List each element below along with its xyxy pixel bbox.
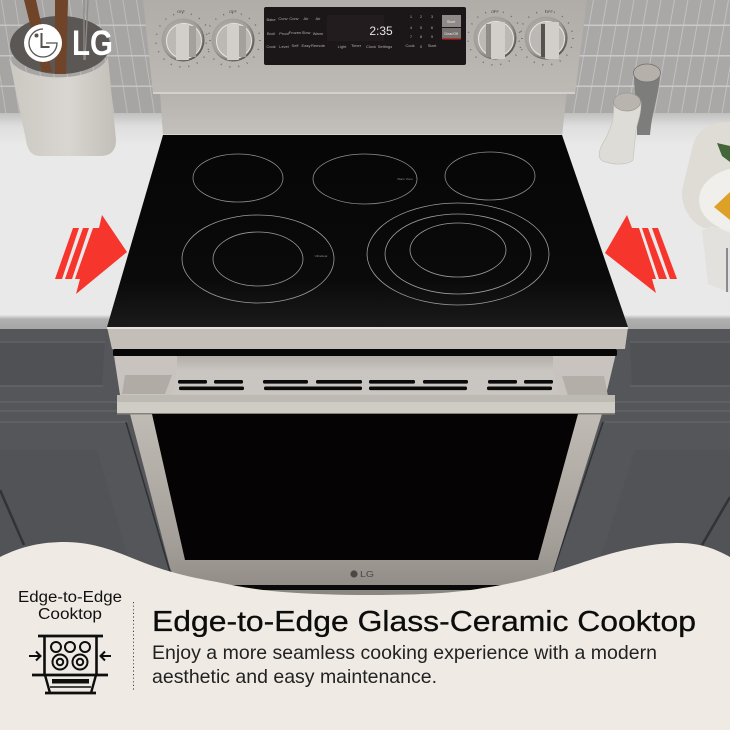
display panel: Clock [366,44,376,49]
display panel: Conv [278,16,288,21]
display panel: Easy [302,43,310,48]
display panel: Timer [351,43,362,48]
display panel: 7 [410,34,413,39]
burner bottom left [182,215,334,303]
display panel: Level [279,44,289,49]
description [152,642,657,688]
badge label: Edge-to-Edge [18,589,122,606]
display panel [264,7,466,65]
lower cabinets [0,329,730,604]
display panel: 4 [410,25,413,30]
display panel: Broil [267,31,275,36]
knob 1: OFF [177,9,186,14]
oven window [152,414,578,560]
display panel: Air [316,16,321,21]
knob 3: OFF [491,9,500,14]
burner top middle [313,154,417,204]
vent slots [178,380,553,390]
knob 3 [468,9,522,65]
display panel: Light [338,44,347,49]
badge label: Cooktop [38,606,102,623]
knob 4 [519,9,573,65]
display panel: Settings [378,44,392,49]
glass-ceramic cooktop [107,135,628,327]
description: aesthetic and easy maintenance. [152,666,437,688]
heading: Edge-to-Edge Glass-Ceramic Cooktop [152,606,696,638]
display panel: 2:35 [369,24,393,38]
icon: cooktop with arrows [29,636,111,693]
display panel: 3 [431,14,434,19]
burner top left [193,154,283,202]
feature badge [18,589,122,693]
display panel: Slow [302,30,310,35]
display panel: Cook [266,44,276,49]
display panel: Remote [311,43,326,48]
kitchen backsplash tiles [0,0,730,116]
burner top right [445,152,535,200]
display panel: Air [304,16,309,21]
range control panel [143,0,587,94]
cutlery cup with utensils [9,0,116,156]
red arrow pointing right [55,215,127,294]
white countertop [0,113,730,330]
display panel: Clear/Off [444,32,458,36]
description: Enjoy a more seamless cooking experience with a modern [152,642,657,664]
knob 2 [206,9,260,67]
oven door frame [130,414,602,600]
display panel: 9 [431,34,434,39]
display panel: Self [292,43,299,48]
salt and pepper shakers [599,64,660,164]
oven bottom gap [170,585,560,600]
burner bottom right [367,203,549,305]
LG logo: LG [72,24,113,63]
LG logo [24,24,113,63]
knob 2: OFF [229,9,238,14]
display panel: 2 [420,14,423,19]
oven door logo: LG [360,570,374,579]
glass-ceramic cooktop: Warm Zone [397,177,413,181]
display panel: 0 [420,44,423,49]
display panel: Start [447,19,456,24]
badge label [18,589,122,623]
glass-ceramic cooktop: UltraHeat [315,254,328,258]
oven vent area [113,349,617,395]
bottom caption panel [0,542,730,730]
display panel: Proof [279,31,290,36]
display panel: Cook [405,43,415,48]
display panel: 8 [420,34,423,39]
knob 4: OFF [545,9,554,14]
range front edge [107,327,628,349]
display panel: Conv [289,16,299,21]
display panel: Warm [313,31,324,36]
display panel: 5 [420,25,423,30]
oven door logo [350,570,374,579]
display panel: Frozen [289,30,301,35]
display panel: 1 [410,14,413,19]
red arrow pointing left [605,215,677,293]
plate with food and napkin [682,122,730,293]
oven door handle [117,375,615,414]
display panel: Start [428,43,437,48]
display panel: Bake [266,17,276,22]
knob 1 [156,9,210,67]
display panel: 6 [431,25,434,30]
range back panel [160,92,567,136]
